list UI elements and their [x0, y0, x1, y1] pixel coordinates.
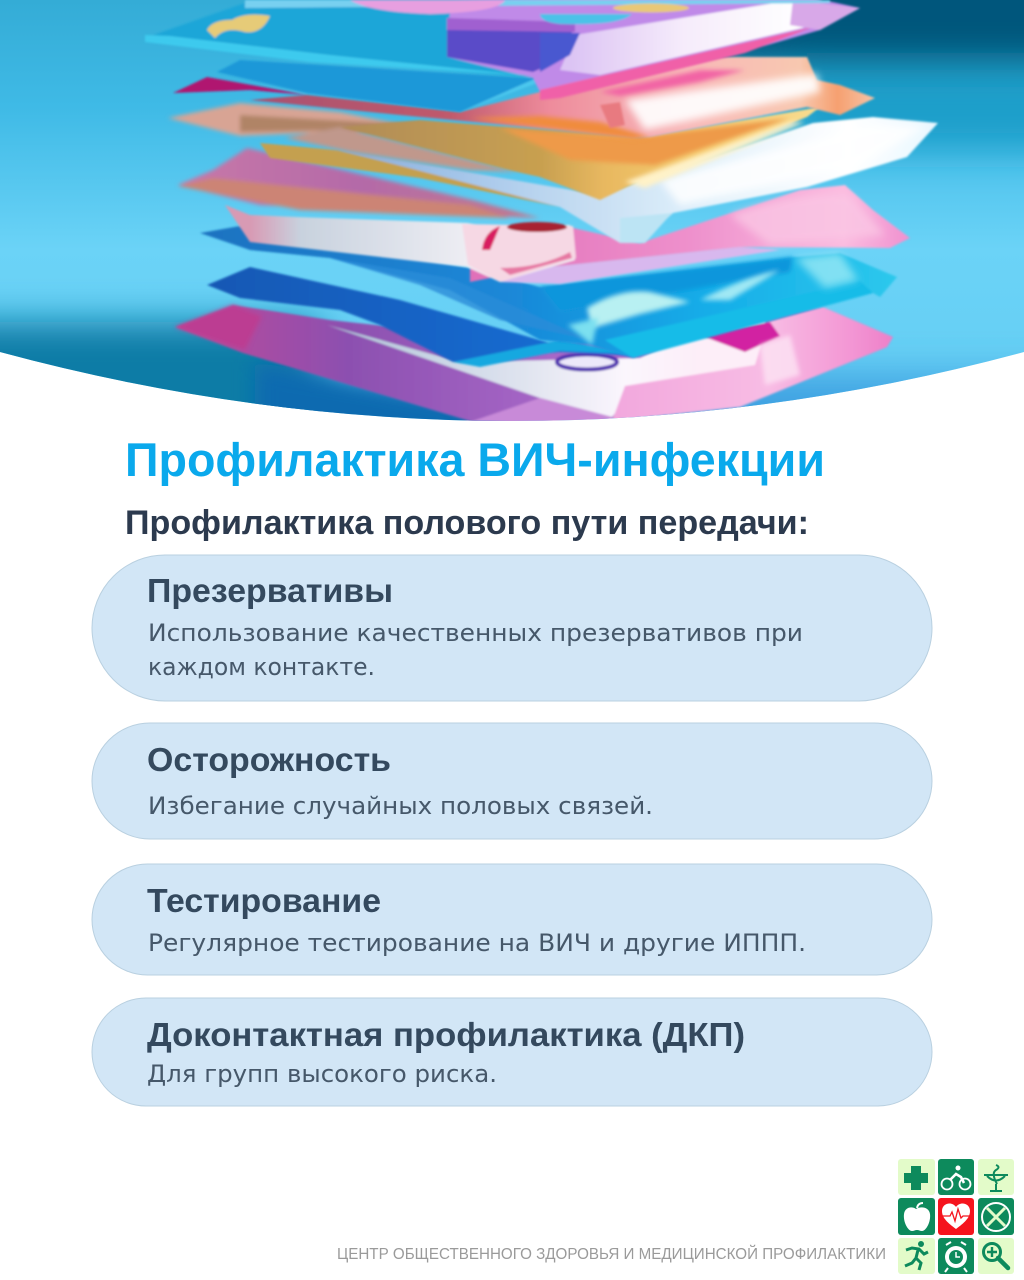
panel: condoms: Использование качественных презервативов при: [148, 619, 803, 647]
top packet: [145, 0, 860, 100]
icon: apple: [898, 1198, 935, 1235]
panel: pre-exposure prophylaxis: Для групп высокого риска.: [147, 1060, 497, 1088]
panel: testing: [92, 864, 932, 975]
icon: alarm clock: [938, 1238, 974, 1274]
white and pink packet: [225, 185, 910, 284]
panel: testing: Тестирование: [147, 882, 381, 919]
icon: no smoking: [978, 1198, 1014, 1235]
subtitle: Профилактика полового пути передачи:: [125, 504, 809, 542]
pink back packet: [178, 148, 540, 218]
panel: condoms: [92, 555, 932, 701]
footer organisation name: ЦЕНТР ОБЩЕСТВЕННОГО ЗДОРОВЬЯ И МЕДИЦИНСКОЙ ПРОФИЛАКТИКИ: [337, 1244, 886, 1263]
icon: cyclist: [938, 1159, 974, 1195]
panel: condoms: Презервативы: [147, 572, 393, 609]
panel: condoms: каждом контакте.: [148, 653, 375, 681]
panel: pre-exposure prophylaxis: [92, 998, 932, 1106]
hero photo: stack of colourful packets: [0, 0, 1024, 462]
panel: caution: Осторожность: [147, 741, 391, 778]
deep blue packet: [207, 267, 640, 367]
blurred peach packet: [168, 103, 600, 172]
gold strip and white packet: [260, 117, 938, 243]
icon: runner: [898, 1238, 935, 1274]
cyan packet: [200, 226, 897, 358]
panel: caution: Избегание случайных половых связей.: [148, 792, 653, 820]
bottom packet: [175, 305, 893, 423]
salmon packet: [250, 57, 875, 139]
icon: bowl of hygieia: [978, 1159, 1014, 1195]
panel: pre-exposure prophylaxis: Доконтактная профилактика (ДКП): [147, 1016, 745, 1053]
icon: medical cross: [898, 1159, 935, 1195]
panel: testing: Регулярное тестирование на ВИЧ и другие ИППП.: [148, 929, 806, 957]
panel: caution: [92, 723, 932, 839]
icon: magnifier: [978, 1238, 1014, 1274]
title: Профилактика ВИЧ-инфекции: [125, 433, 825, 486]
magenta flap and blue wedge: [173, 60, 556, 112]
gold packet: [340, 107, 820, 200]
icon: heart with pulse: [938, 1198, 974, 1235]
logo: health icon grid: [898, 1159, 1014, 1274]
